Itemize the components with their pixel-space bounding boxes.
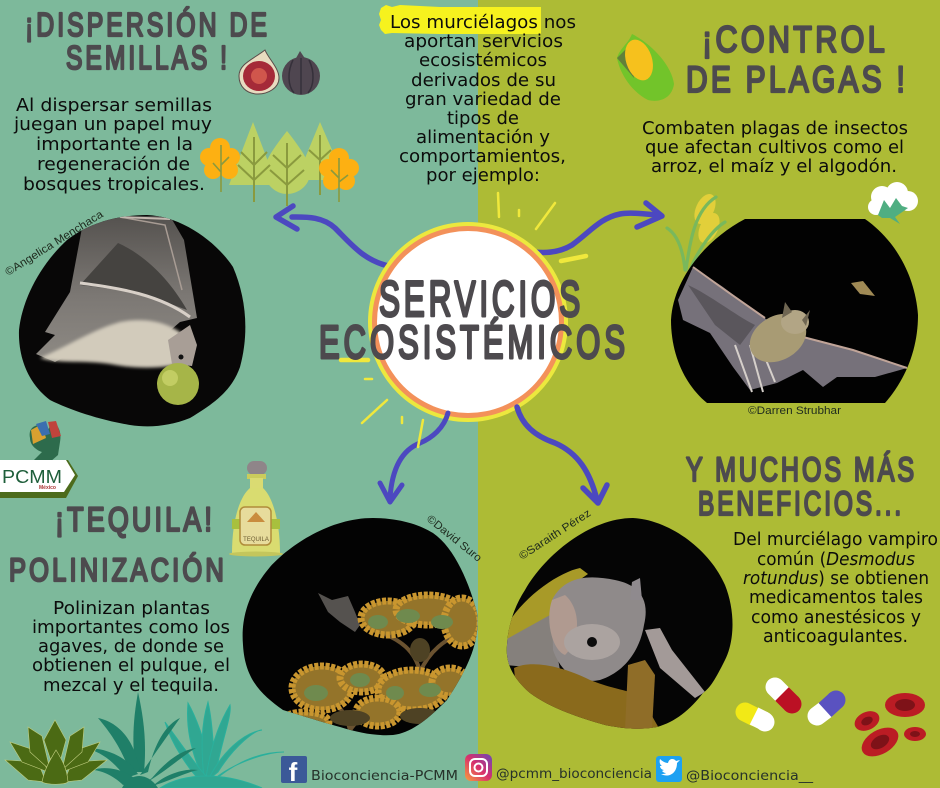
text: polinización: agaves, de donde se	[38, 637, 224, 657]
illustration: agave plants	[5, 692, 284, 788]
logo: PCMM: PCMM	[2, 467, 62, 487]
central circle	[368, 222, 568, 422]
arrow: to other benefits	[517, 407, 607, 503]
arrow: to pollination	[380, 413, 448, 502]
text: dispersión de semillas: Al dispersar semillas	[16, 96, 212, 116]
text: dispersión de semillas: regeneración de	[37, 155, 190, 175]
heading: control de plagas: ¡CONTROL	[702, 19, 888, 60]
text: más beneficios: común (Desmodus	[757, 550, 915, 570]
text: más beneficios	[733, 530, 938, 647]
icon: trees	[200, 122, 359, 206]
text: polinización: importantes como los	[32, 618, 230, 638]
arrow: to seed dispersal	[276, 206, 393, 267]
text: polinización: mezcal y el tequila.	[43, 676, 219, 696]
text: polinización: Polinizan plantas	[53, 599, 210, 619]
heading: dispersión de semillas: SEMILLAS !	[66, 39, 230, 76]
photo: bat carrying fruit	[15, 210, 251, 430]
heading: dispersión de semillas	[25, 6, 270, 76]
text: control de plagas: arroz, el maíz y el algodón.	[651, 157, 897, 177]
social: instagram: @pcmm_bioconciencia	[496, 766, 652, 782]
icon: blood cells	[851, 693, 926, 762]
icon: tequila bottle: TEQUILA	[243, 537, 269, 543]
text: más beneficios: como anestésicos y	[751, 608, 921, 628]
background: left teal half	[0, 0, 478, 788]
social: facebook	[281, 756, 458, 787]
heading: polinización: POLINIZACIÓN	[9, 552, 227, 588]
social: twitter: @Bioconciencia__	[686, 768, 813, 784]
title: servicios ecosistémicos: SERVICIOS	[379, 271, 584, 327]
text: más beneficios: anticoagulantes.	[763, 627, 908, 647]
text: control de plagas	[642, 119, 908, 177]
text: dispersión de semillas	[13, 96, 212, 195]
text: intro	[379, 5, 576, 186]
icon: corn	[617, 34, 674, 101]
text: polinización	[32, 599, 230, 696]
text: más beneficios: rotundus) se obtienen	[743, 569, 929, 589]
social: facebook: f	[289, 757, 298, 787]
photo: bat and moth in flight	[665, 215, 925, 407]
text: intro: tipos de	[447, 109, 519, 129]
text: intro: Los murciélagos nos	[390, 13, 576, 33]
text: intro: comportamientos,	[399, 147, 566, 167]
title: servicios ecosistémicos	[319, 271, 629, 368]
caption: Darren Strubhar: ©Darren Strubhar	[748, 405, 841, 417]
text: intro: por ejemplo:	[426, 166, 540, 186]
icon: cotton	[868, 182, 918, 224]
text: dispersión de semillas: bosques tropicales.	[23, 175, 205, 195]
decorative rays	[341, 193, 586, 447]
logo: PCMM	[0, 421, 78, 498]
arrow: to pest control	[523, 203, 662, 253]
photo: vampire bat	[500, 514, 740, 734]
text: intro: derivados de su	[411, 71, 556, 91]
text: dispersión de semillas: importante en la	[36, 135, 193, 155]
text: intro: gran variedad de	[405, 90, 561, 110]
icon: tequila bottle	[229, 461, 283, 556]
icon: rice plant	[667, 191, 725, 270]
text: control de plagas: que afectan cultivos como el	[645, 138, 904, 158]
text: intro: aportan servicios	[404, 32, 563, 52]
social: twitter	[656, 756, 813, 784]
social: facebook: Bioconciencia-PCMM	[311, 768, 458, 784]
icon: pills	[745, 687, 836, 722]
title: servicios ecosistémicos: ECOSISTÉMICOS	[319, 316, 629, 368]
heading: tequila: ¡TEQUILA!	[55, 501, 215, 539]
text: más beneficios: medicamentos tales	[749, 588, 923, 608]
text: más beneficios: Del murciélago vampiro	[733, 530, 938, 550]
text: intro: ecosistémicos	[419, 51, 547, 71]
credit: Saraith Pérez: ©Saraith Pérez	[517, 507, 593, 563]
credit: Angelica Menchaca: ©Angelica Menchaca	[3, 208, 106, 279]
social: instagram	[465, 754, 652, 782]
credit: David Suro: ©David Suro	[424, 513, 484, 564]
text: polinización: obtienen el pulque, el	[32, 656, 230, 676]
heading: dispersión de semillas: ¡DISPERSIÓN DE	[25, 6, 270, 43]
icon: figs	[239, 50, 320, 95]
logo: PCMM: México	[39, 485, 56, 491]
text: control de plagas: Combaten plagas de insectos	[642, 119, 908, 139]
heading: y muchos más beneficios	[686, 451, 917, 523]
text: dispersión de semillas: juegan un papel muy	[13, 115, 212, 135]
text: intro: alimentación y	[416, 128, 550, 148]
photo: bat pollinating agave	[238, 514, 483, 739]
background: right olive half	[478, 0, 940, 788]
heading: control de plagas	[686, 19, 908, 100]
